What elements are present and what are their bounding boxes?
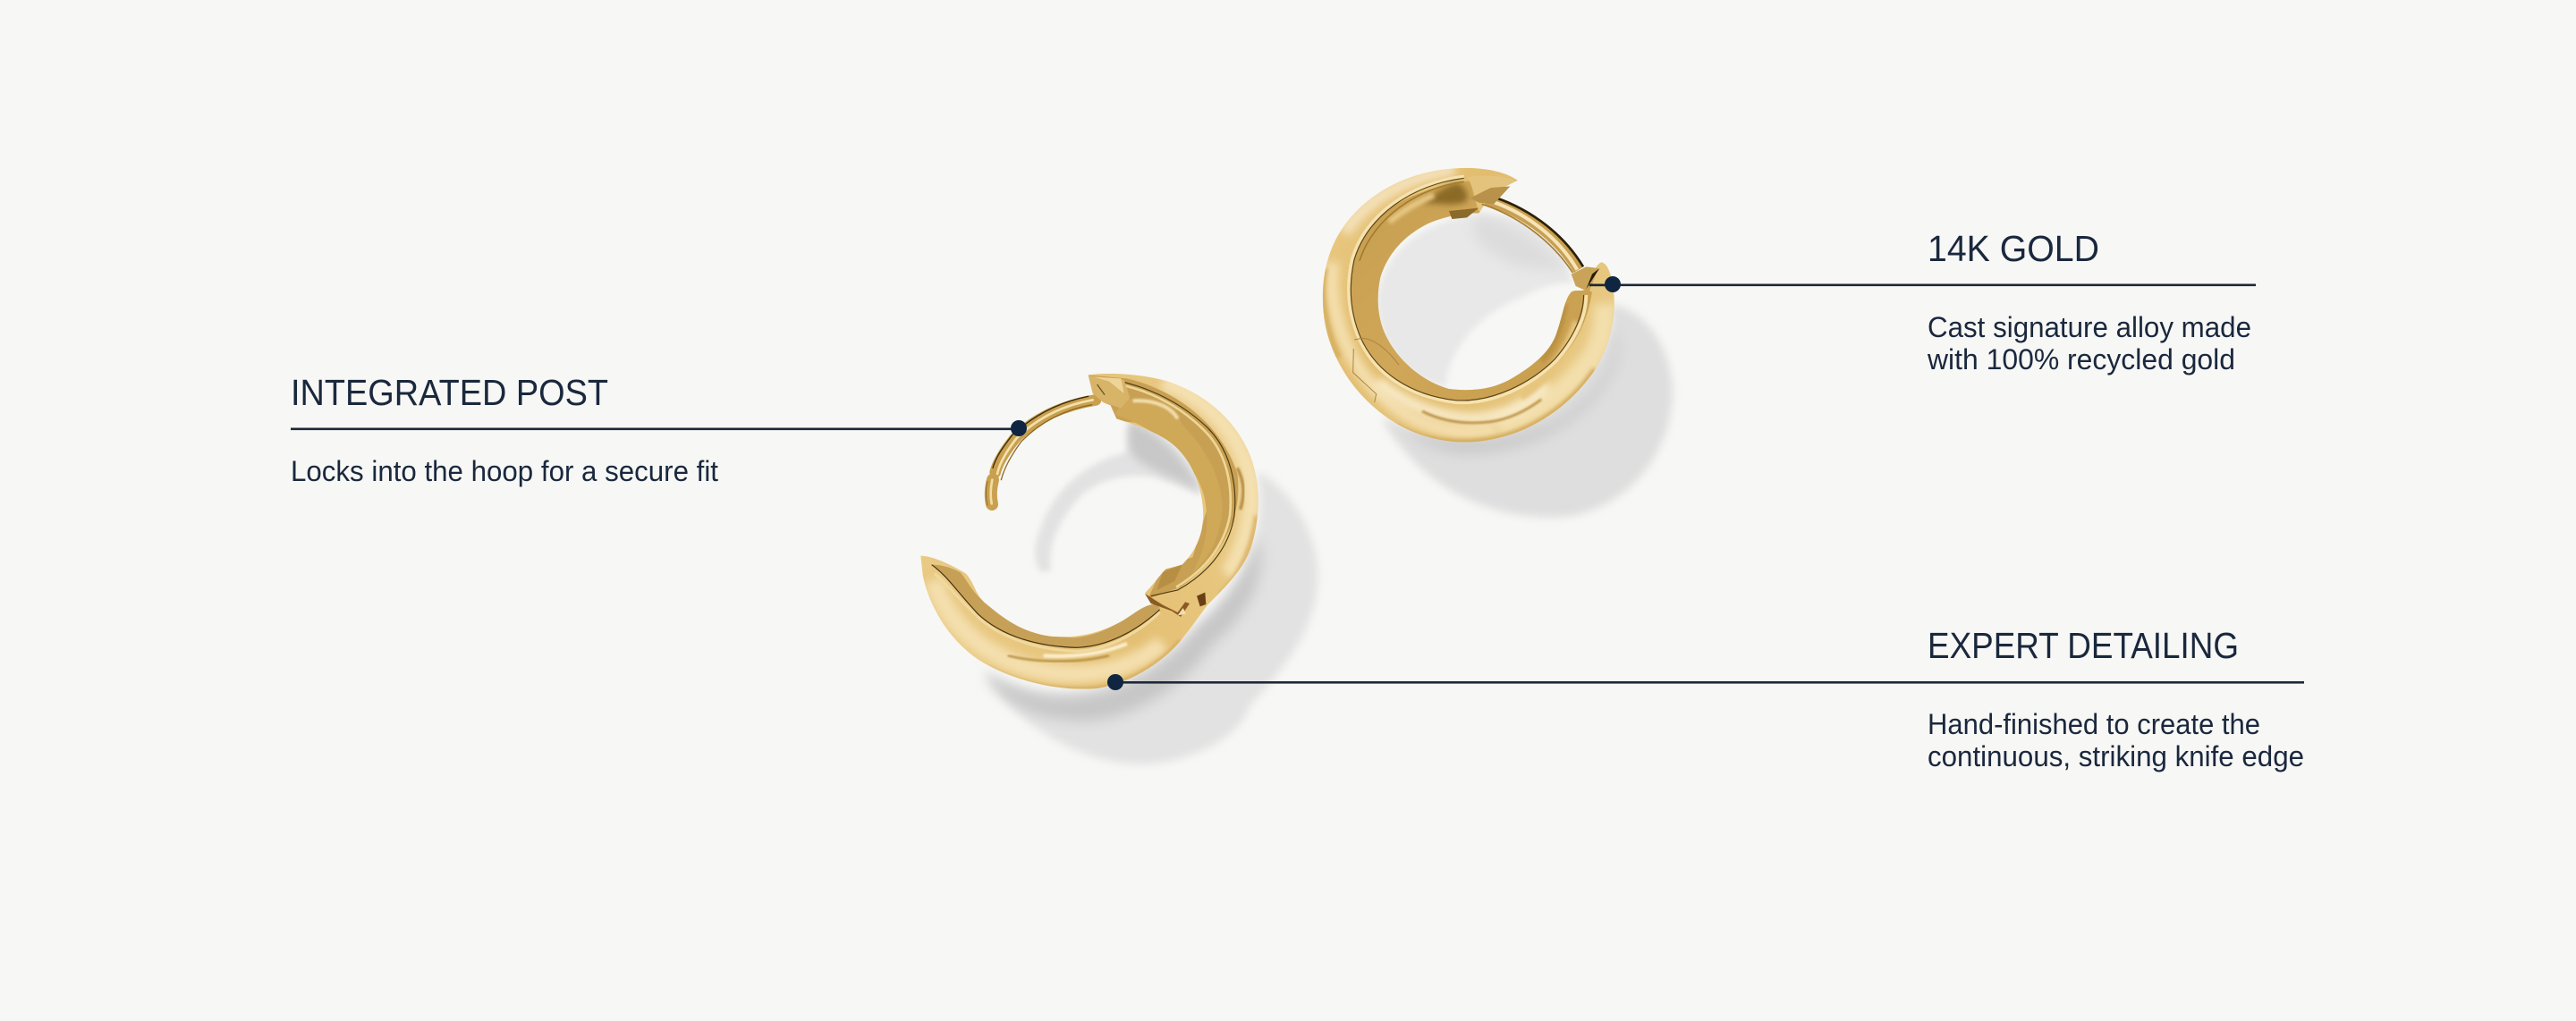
- callout: expert detailing: continuous, striking knife edge: [1928, 740, 2304, 772]
- post: back hoop: [1482, 195, 1583, 273]
- description: integrated post: Locks into the hoop for a secure fit: [291, 455, 718, 487]
- callout: integrated post: [291, 372, 1027, 487]
- post joints: back hoop: [1449, 186, 1605, 292]
- callout: expert detailing: [1107, 625, 2304, 772]
- interior band: back hoop: [1349, 176, 1592, 402]
- heading: expert detailing: EXPERT DETAILING: [1928, 625, 2239, 666]
- heading: 14k gold: 14K GOLD: [1928, 228, 2099, 269]
- cast shadow: front hoop: [984, 420, 1318, 764]
- interior band: front hoop: [932, 375, 1238, 648]
- leader line and dot: expert detailing: [1107, 674, 2304, 690]
- heading: integrated post: INTEGRATED POST: [291, 372, 608, 413]
- cast shadow: back hoop: [1377, 215, 1673, 518]
- leader line and dot: integrated post: [291, 420, 1027, 436]
- post: front hoop: [986, 396, 1096, 505]
- rim lines: front hoop: [1094, 377, 1235, 596]
- post joint and clasp: front hoop: [1089, 375, 1206, 617]
- leader line and dot: 14k gold: [1589, 276, 2256, 292]
- description: 14k gold: Cast signature alloy made: [1928, 311, 2251, 343]
- callout: 14k gold: with 100% recycled gold: [1927, 343, 2235, 375]
- hoop body: back hoop: [1322, 168, 1614, 442]
- earring: back hoop (14K gold): [1306, 155, 1673, 518]
- callout: 14k gold: [1589, 228, 2256, 375]
- hoop body: front hoop: [912, 367, 1270, 697]
- rim lines: back hoop: [1349, 176, 1586, 402]
- earring: front hoop (open): [912, 367, 1318, 764]
- description: expert detailing: Hand-finished to create the: [1928, 708, 2260, 740]
